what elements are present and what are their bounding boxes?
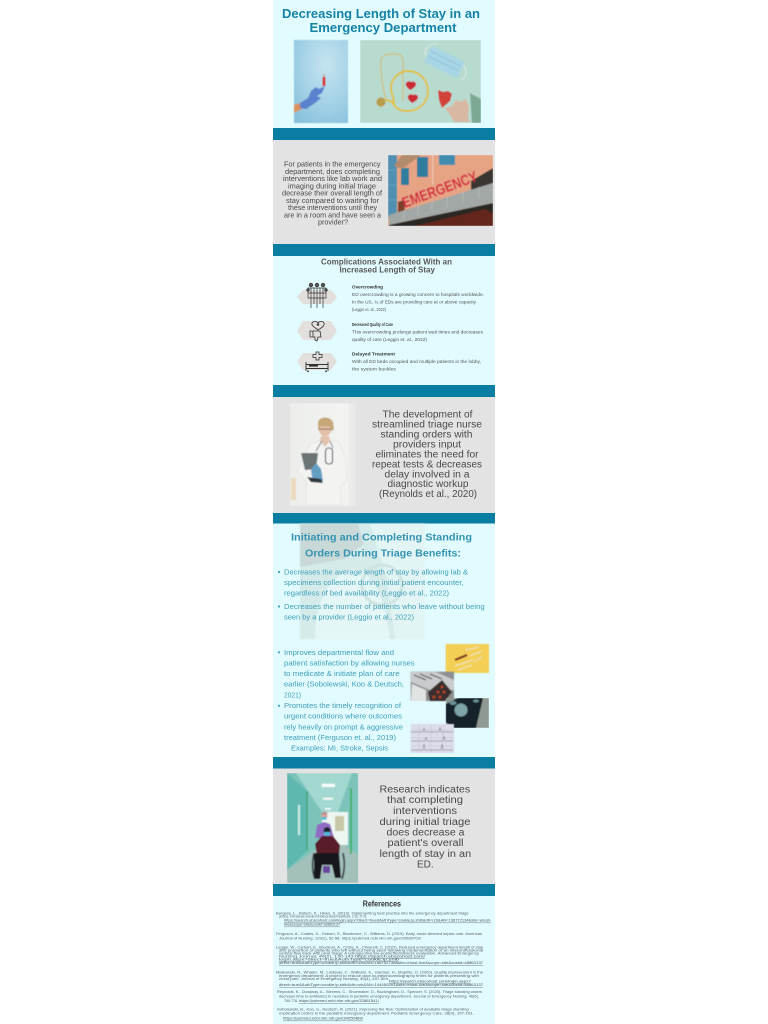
list: benefits second group: 2021) xyxy=(284,690,301,700)
text: research question: For patients in the emergency xyxy=(284,160,381,168)
photo: gloved hand with syringe xyxy=(294,40,348,123)
reference: Burgess: process. International Journal of Evidence-Based Healthcare, 17(1), 27-35. xyxy=(279,914,367,918)
list: benefits first group: seen by a provider (Leggio et al., 2022) xyxy=(284,612,414,622)
reference: Leggio: direct=true&AuthType=cookie,ip,shib&db=rzh&AN=156702738&site=ehost-live&scope=site&custid=s8863137 xyxy=(279,961,483,965)
text: conclusion: during initial triage xyxy=(380,817,471,828)
list: benefits first group: Decreases the number of patients who leave without being xyxy=(284,602,485,611)
list: benefits first group: specimens collection during initial patient encounter, xyxy=(284,578,464,587)
sign lettering: EMERGENCY xyxy=(400,168,480,212)
reference: Leggio: vertical flow track with pivot triage: A retrospective pre-post/effectiveness evaluation. Advanced Emergency xyxy=(279,952,479,956)
icon: delayed treatment xyxy=(297,352,337,372)
reference: Sobolewski: https://pubmed.ncbi.nlm.nih.gov/34050489/ xyxy=(283,1017,363,1021)
reference: Malkowski: Malkowski, R., Whalen, M., Lindauer, C., Williams, K., Gardner, H., Maphite, D. (2020). Quality improvement in the xyxy=(276,970,483,974)
list: benefits second group: earlier (Sobolewski, Koo & Deutsch, xyxy=(284,680,404,688)
panel: standing orders statement xyxy=(273,397,495,513)
list: benefits second group: treatment (Ferguson et. al., 2019) xyxy=(284,733,396,742)
heading: complications: Increased Length of Stay xyxy=(340,266,436,274)
list: benefits first group: regardless of bed availability (Leggio et al., 2022) xyxy=(284,588,450,598)
icon: overcrowding xyxy=(297,283,337,308)
infographic xyxy=(273,0,495,1024)
text: standing orders statement: diagnostic workup xyxy=(388,479,469,490)
text: decreased quality of care: Decreased Quality of Care xyxy=(352,322,394,327)
photo: doctor with tablet xyxy=(290,403,356,506)
text: delayed treatment xyxy=(352,352,481,372)
photo: syringes on yellow xyxy=(446,644,489,673)
band: teal divider xyxy=(273,513,495,524)
text: standing orders statement: standing orders with xyxy=(380,430,472,440)
text: conclusion: length of stay in an xyxy=(380,849,471,860)
text: conclusion: interventions xyxy=(393,806,457,817)
text: decreased quality of care: quality of care (Leggio et. al., 2022) xyxy=(352,337,428,342)
icon: decreased quality of care xyxy=(297,321,337,341)
text: conclusion xyxy=(380,784,471,870)
text: conclusion: patient's overall xyxy=(388,838,464,849)
reference: Reynolds xyxy=(277,990,482,1003)
heading: benefits: Initiating and Completing Standing xyxy=(291,532,472,544)
text: standing orders statement: repeat tests & decreases xyxy=(372,460,482,470)
reference: Malkowski: direct=true&AuthType=cookie,ip,shib&db=rzh&AN=144450291&site=ehost-live&scope=site&custid=s8863137 xyxy=(279,983,483,987)
text: overcrowding: In the US, ¾ of EDs are providing care at or above capacity xyxy=(352,300,477,304)
panel: conclusion xyxy=(273,768,495,884)
reference: Sobolewski: medication orders in the pediatric emergency department. Pediatric Emergency Care, 38(4), 157-161. xyxy=(279,1012,474,1016)
reference: Sobolewski xyxy=(277,1008,474,1021)
reference: Leggio xyxy=(276,946,483,965)
reference: Ferguson xyxy=(276,932,482,941)
reference: Leggio: Nursing Journal, 44(2), 130-143. xyxy=(279,954,355,958)
title xyxy=(282,6,480,35)
text: research question: stay compared to waiting for xyxy=(286,196,379,205)
reference: Malkowski: emergency department: A project to reduce door-to-electrocardiography times for patients presenting with xyxy=(279,974,479,978)
photo: blister packs xyxy=(411,672,454,701)
reference: Leggio: login.aspx?direct=true&AuthType=cookie,ip,shib xyxy=(279,958,399,962)
text: research question: provider? xyxy=(318,218,348,226)
reference: Ferguson: Journal of Nursing, 119(1), 52-58. https://pubmed.ncbi.nlm.nih.gov/30589703/ xyxy=(279,937,421,941)
text: conclusion: does decrease a xyxy=(386,828,465,838)
text: overcrowding: Overcrowding xyxy=(352,284,384,290)
panel: benefits xyxy=(278,524,489,753)
text: conclusion: Research indicates xyxy=(380,784,470,796)
list: benefits second group: rely heavily on prompt & aggressive xyxy=(284,722,403,732)
title: Decreasing Length of Stay in an xyxy=(282,6,480,21)
text: research question: decrease their overall length of xyxy=(282,188,383,198)
reference: Reynolds: 769-778. xyxy=(284,999,298,1003)
list: benefits second group xyxy=(278,648,415,752)
text: delayed treatment: With all ED beds occupied and multiple patients in the lobby, xyxy=(352,359,481,364)
band: teal divider xyxy=(273,757,495,768)
text: conclusion: that completing xyxy=(387,795,463,806)
text: research question: department, does completing xyxy=(285,167,380,176)
text: overcrowding: ED overcrowding is a growing concern to hospitals worldwide. xyxy=(352,292,484,297)
text: standing orders statement: streamlined triage nurse xyxy=(372,420,482,430)
photo: emergency sign on building xyxy=(388,155,493,226)
text: research question: are in a room and have seen a xyxy=(284,210,382,219)
reference: Leggio: https://search.ebscohost.com/ xyxy=(355,954,425,958)
text: standing orders statement: eliminates the need for xyxy=(376,450,479,460)
photo: stethoscope, mask and hearts xyxy=(360,40,481,123)
reference: Reynolds: decrease time to antibiotics in neonates in pediatric emergency department. Journal of Emergency Nursing, 46(6), xyxy=(279,994,479,998)
reference: Burgess: Burgess, L., Ratsch, K., Hines, S. (2019). Implementing best practice into the emergency department triage xyxy=(276,911,469,915)
heading: complications: Complications Associated With an xyxy=(321,258,452,266)
reference: Burgess: live&scope=site&custid=s8863137 xyxy=(284,923,340,927)
background: light column xyxy=(273,0,495,1024)
list: benefits second group: Examples: MI, Stroke, Sepsis xyxy=(291,744,388,752)
text: standing orders statement: The development of xyxy=(382,410,473,420)
reference: Leggio: Leggio, W., Carhart, E., Bruckner, A., Criste, A., Cimorelli, C. (2022). Reduced emergency department length of stay xyxy=(276,946,483,950)
reference: Leggio: and proportion of patients who left without being seen following implementation of an interprofessional xyxy=(279,948,483,952)
text: standing orders statement: providers input xyxy=(393,440,461,450)
text: research question: these interventions until they xyxy=(288,203,377,212)
panel: title section xyxy=(282,6,481,123)
reference: Ferguson: Ferguson, A., Coates, D., Osborn, S., Blackmore, C., Williams, D. (2019). Early, nurse-directed sepsis care. American xyxy=(276,932,482,936)
photo: ECG strip xyxy=(411,724,454,753)
heading: benefits: Orders During Triage Benefits: xyxy=(305,548,461,560)
reference: Sobolewski: Sobolewski, B., Koo, S., Deutsch, R. (2021). Improving the flow: Optimization of available triage standing xyxy=(277,1008,469,1012)
text: decreased quality of care: This overcrowding prolongs patient wait times and decreases xyxy=(352,330,484,334)
text: delayed treatment: Delayed Treatment xyxy=(352,352,396,356)
photo: patient in wheelchair in hallway xyxy=(287,773,358,883)
reference: Burgess xyxy=(276,911,492,927)
text: overcrowding: (Leggio et. al., 2022) xyxy=(352,307,386,312)
band: teal divider xyxy=(273,128,495,140)
text: standing orders statement: (Reynolds et al., 2020) xyxy=(379,489,477,500)
list: benefits second group: to medicate & initiate plan of care xyxy=(284,669,400,678)
list: benefits second group: patient satisfaction by allowing nurses xyxy=(284,658,415,668)
text: research question: interventions like lab work and xyxy=(283,174,382,183)
list: benefits first group xyxy=(278,568,485,622)
reference: Reynolds: Reynolds, K., Dunaway, A., Stevens, C., Shoemaker, D., Buckingham, D., Spencer, S. (2020). Triage standing orders xyxy=(277,990,482,994)
watermark photo xyxy=(300,524,425,639)
panel: PICO question xyxy=(273,140,495,244)
text: standing orders statement: delay involved in a xyxy=(384,470,470,480)
text: conclusion: ED. xyxy=(417,860,434,870)
list: benefits first group: Decreases the average length of stay by allowing lab & xyxy=(284,568,468,576)
heading: complications xyxy=(321,258,452,274)
band: teal divider xyxy=(273,385,495,397)
band: teal divider xyxy=(273,244,495,256)
reference: Malkowski: chest pain. Journal of Emergency Nursing, 46(4), 497-504. xyxy=(279,977,389,981)
reference: Reynolds: https://pubmed.ncbi.nlm.nih.gov/32861541/ xyxy=(299,999,379,1003)
photo: x-ray film xyxy=(446,698,489,728)
list: benefits second group: Promotes the timely recognition of xyxy=(284,701,402,710)
panel: references xyxy=(276,900,492,1021)
text: delayed treatment: the system buckles xyxy=(352,366,397,372)
text: standing orders statement xyxy=(372,410,482,500)
reference: Burgess: https://search.ebscohost.com/login.aspx?direct=true&AuthType=cookie,ip,shib&db=rzh&AN=136772134&site=ehost- xyxy=(284,919,492,923)
list: benefits second group: urgent conditions where outcomes xyxy=(284,712,402,720)
text: research question: imaging during initial triage xyxy=(288,181,376,190)
list: benefits second group: Improves departmental flow and xyxy=(284,648,394,657)
text: decreased quality of care xyxy=(352,322,484,342)
heading: references: References xyxy=(363,900,401,908)
text: overcrowding xyxy=(352,284,484,312)
panel: complications xyxy=(297,258,484,372)
band: teal divider xyxy=(273,884,495,896)
reference: Malkowski xyxy=(276,970,483,987)
text: research question xyxy=(282,160,383,226)
title: Emergency Department xyxy=(310,20,457,35)
reference: Malkowski: https://search.ebscohost.com/login.aspx? xyxy=(389,980,471,984)
heading: benefits xyxy=(291,532,472,560)
